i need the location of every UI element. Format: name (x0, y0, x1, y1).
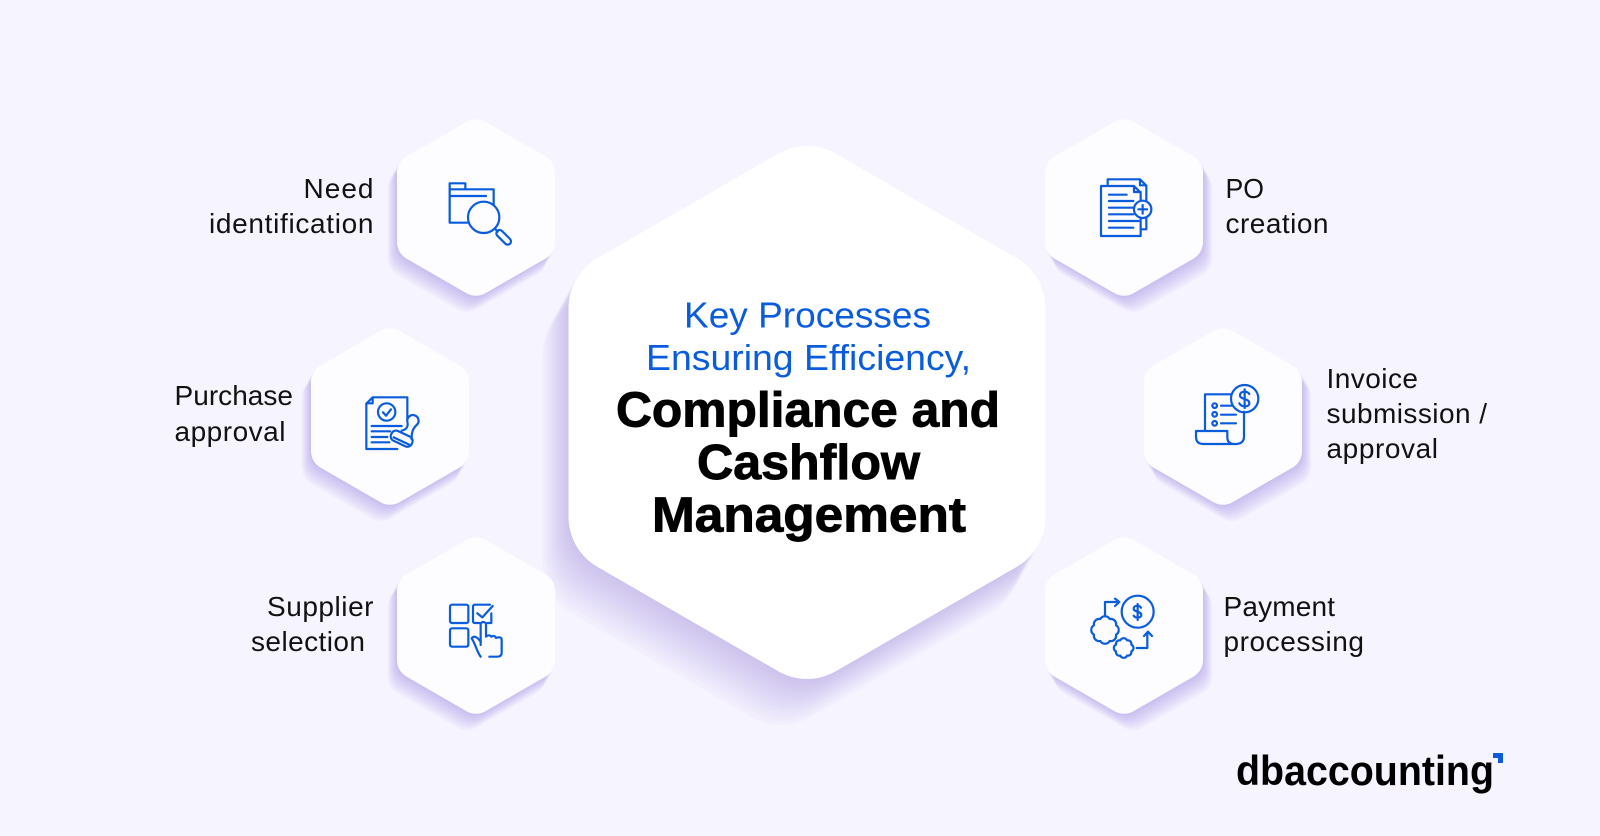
panel: supplier selection (251, 537, 555, 730)
label: purchase approval: Purchase (174, 380, 293, 411)
label: po creation: creation (1226, 208, 1328, 239)
label: po creation: PO (1226, 173, 1264, 204)
icon: gears and dollar coin (1091, 596, 1154, 658)
heading: key processes: Key Processes (684, 294, 931, 336)
label: need identification (209, 173, 374, 239)
heading: compliance and cashflow management: Compliance and (616, 384, 1000, 438)
icon: document with stamp (366, 397, 419, 449)
heading: compliance and cashflow management (616, 384, 1000, 542)
label: need identification: identification (209, 208, 374, 239)
panel: purchase approval (174, 328, 469, 521)
label: supplier selection: Supplier (267, 591, 374, 622)
logo: dbaccounting: dbaccounting (1236, 747, 1494, 794)
label: purchase approval: approval (174, 416, 286, 447)
panel: central hexagon (542, 146, 1046, 725)
label: payment processing: Payment (1224, 591, 1335, 622)
label: invoice submission / approval: Invoice (1326, 363, 1418, 394)
icon: checkbox grid with pointing hand (450, 605, 502, 657)
label: need identification: Need (304, 173, 374, 204)
label: invoice submission / approval: submission / (1326, 398, 1487, 429)
panel: payment processing (1045, 537, 1364, 730)
heading: key processes: Ensuring Efficiency, (646, 337, 971, 378)
panel: invoice submission / approval (1144, 328, 1487, 521)
label: po creation (1226, 173, 1328, 239)
heading: key processes (646, 294, 971, 378)
heading: compliance and cashflow management: Management (652, 488, 966, 542)
panel: need identification (209, 119, 555, 312)
icon: documents with plus (1101, 179, 1151, 236)
label: invoice submission / approval (1326, 363, 1487, 464)
label: supplier selection (251, 591, 374, 657)
label: supplier selection: selection (251, 626, 365, 657)
label: payment processing: processing (1224, 626, 1364, 657)
label: payment processing (1224, 591, 1364, 657)
label: purchase approval (174, 380, 293, 447)
panel: po creation (1045, 119, 1328, 312)
icon: folder with magnifying glass (450, 183, 512, 246)
heading: compliance and cashflow management: Cashflow (697, 436, 921, 490)
icon: invoice with dollar coin (1196, 385, 1258, 444)
label: invoice submission / approval: approval (1326, 433, 1438, 464)
